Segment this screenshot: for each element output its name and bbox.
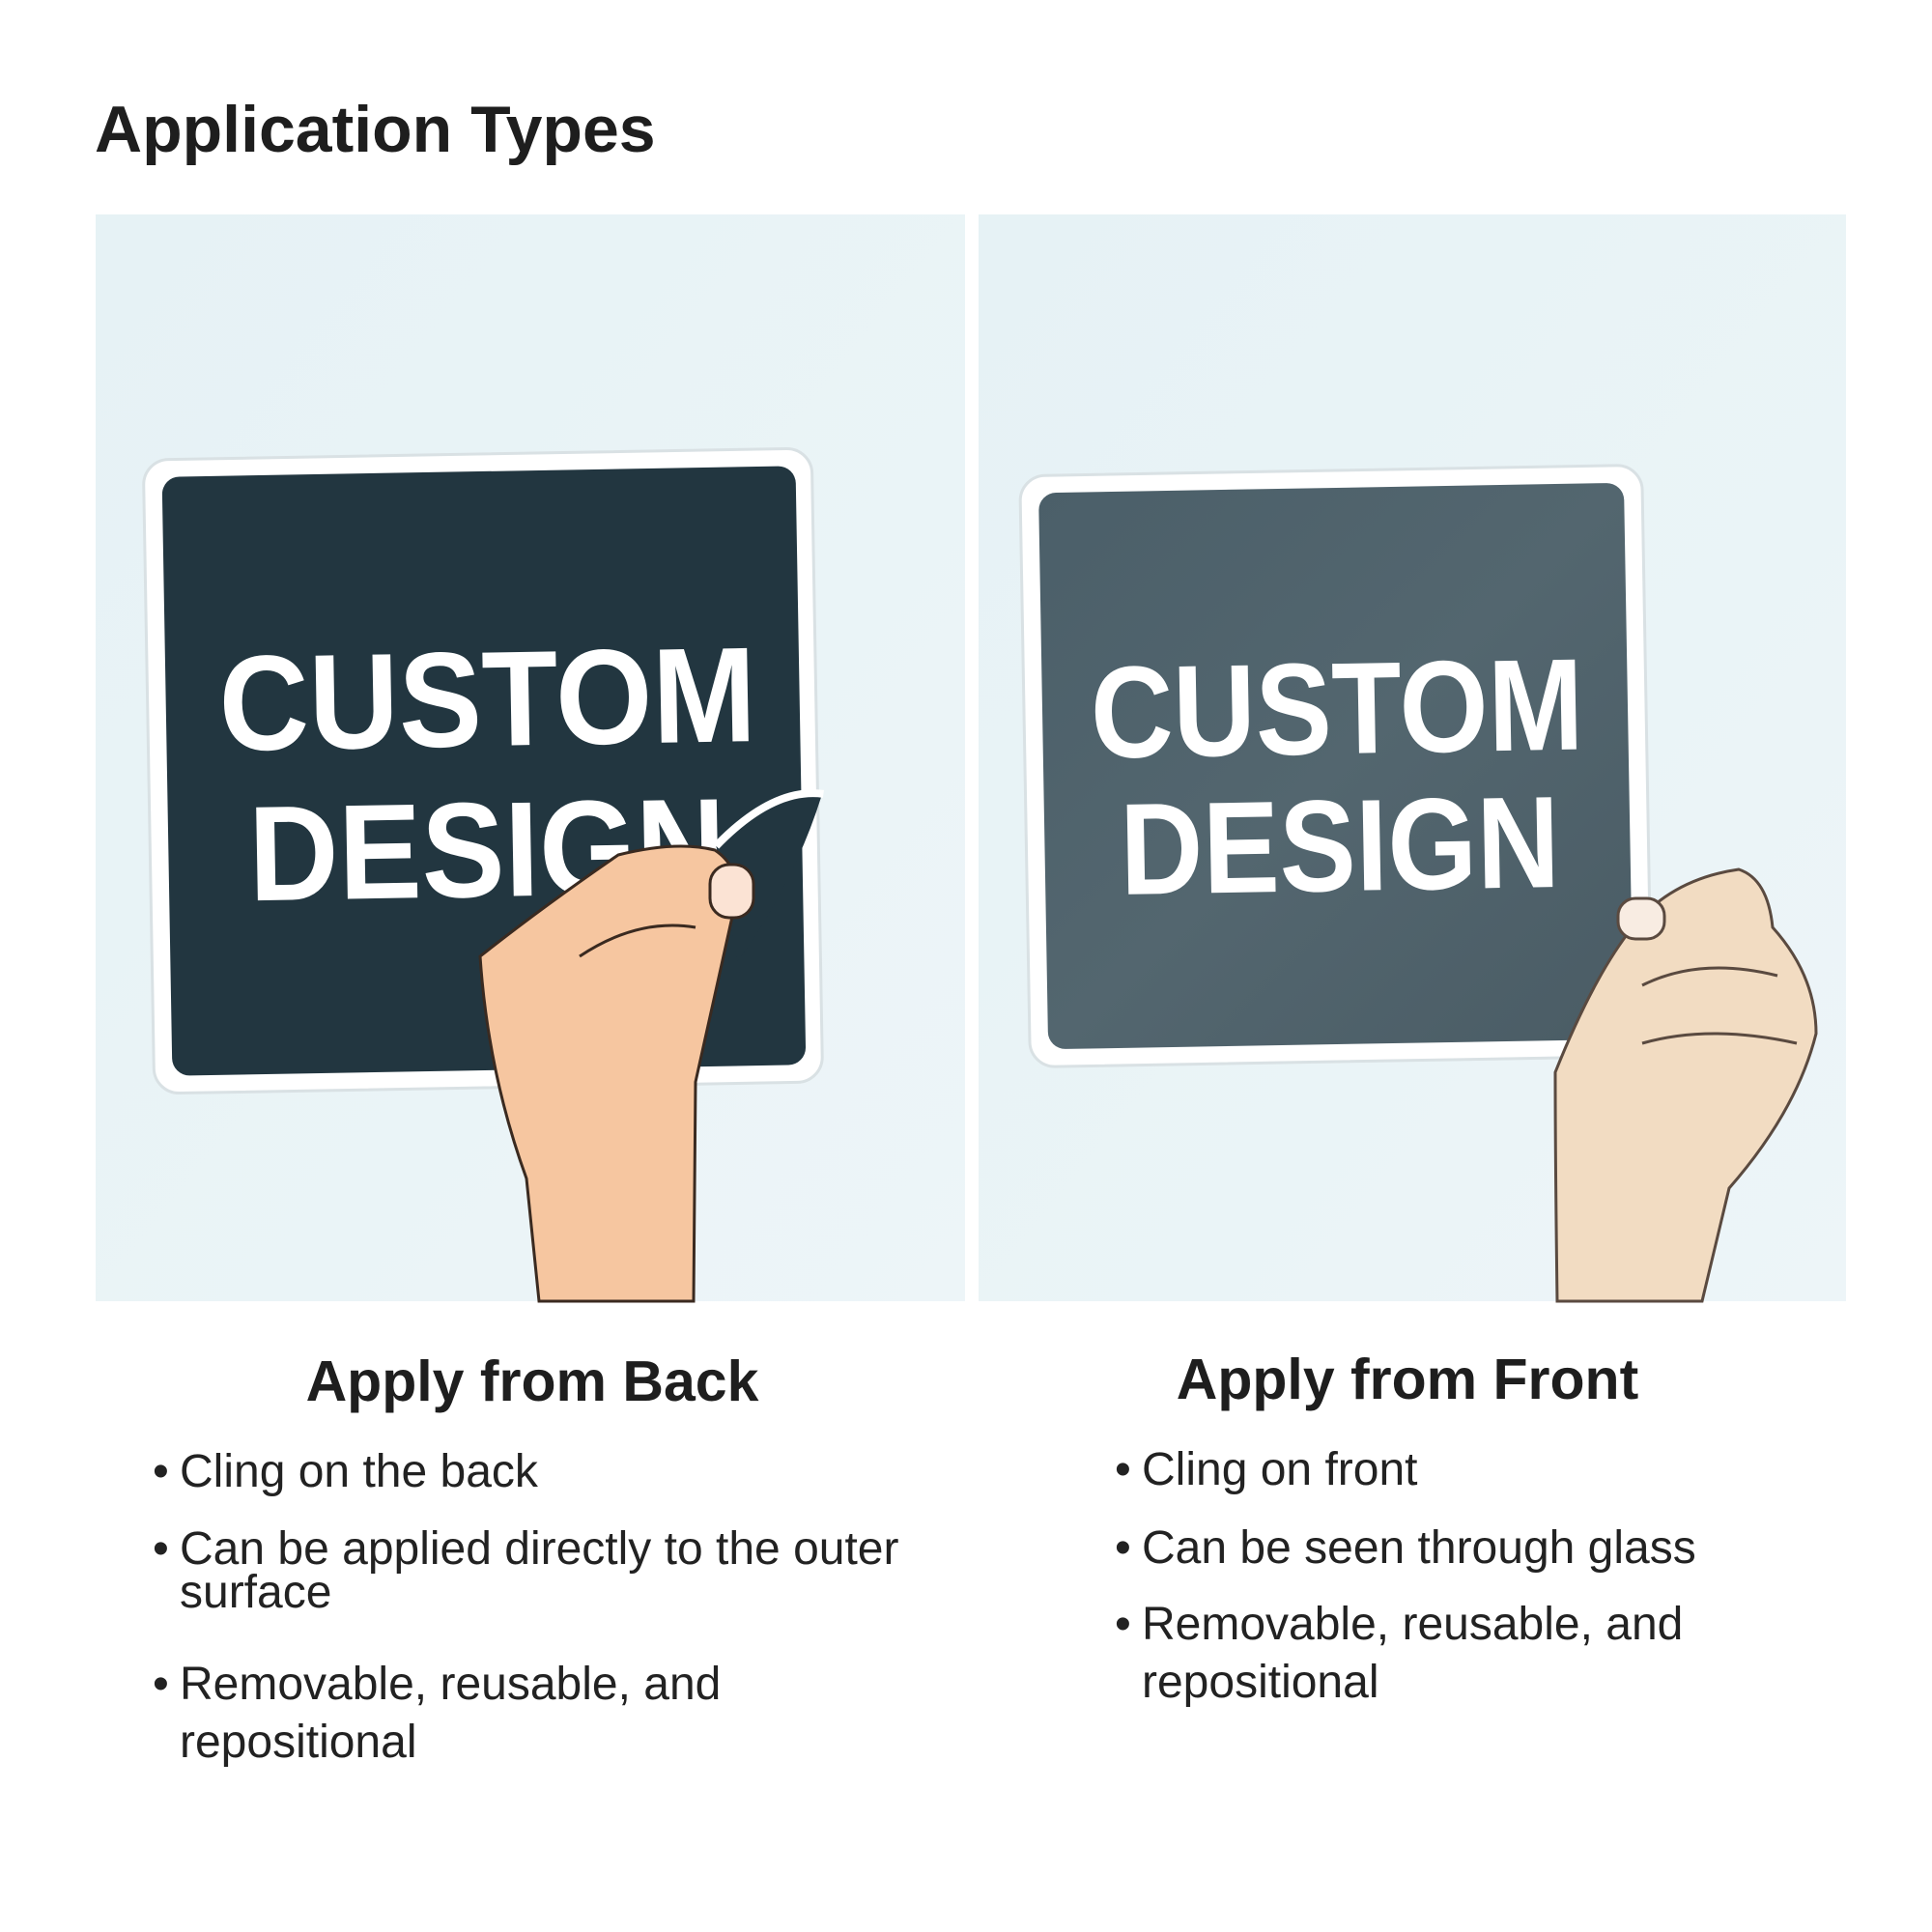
text block: back bullets: Can be applied directly to the outer bbox=[180, 1523, 898, 1575]
text block: back bullets bbox=[153, 1446, 898, 1768]
sticker: back: CUSTOM bbox=[217, 618, 757, 780]
sticker: back: DESIGN bbox=[247, 770, 727, 929]
text block: back bullets: • bbox=[153, 1523, 169, 1575]
text block: front bullets: • bbox=[1115, 1599, 1131, 1650]
text block: back bullets: repositional bbox=[180, 1717, 416, 1768]
text block: back bullets: • bbox=[153, 1659, 169, 1710]
text block: front bullets: Removable, reusable, and bbox=[1142, 1599, 1683, 1650]
text block: front bullets: Can be seen through glass bbox=[1142, 1522, 1696, 1574]
icon: hand back bbox=[480, 846, 736, 1301]
text block: front bullets bbox=[1115, 1444, 1696, 1708]
text block: back bullets: • bbox=[153, 1446, 169, 1497]
sticker: front: DESIGN bbox=[1119, 769, 1561, 923]
title: Application Types bbox=[95, 93, 656, 166]
text block: back bullets: Cling on the back bbox=[180, 1446, 539, 1497]
panel: apply from front bbox=[979, 214, 1846, 1301]
heading: apply from back: Apply from Back bbox=[306, 1350, 759, 1413]
text block: back bullets: surface bbox=[180, 1567, 331, 1618]
panel: apply from back bbox=[96, 214, 965, 1301]
sticker: back bbox=[143, 448, 829, 1094]
heading: apply from front: Apply from Front bbox=[1177, 1348, 1638, 1411]
sticker: front bbox=[1020, 465, 1652, 1067]
text block: front bullets: repositional bbox=[1142, 1657, 1378, 1708]
sticker: front: CUSTOM bbox=[1090, 632, 1584, 785]
text block: front bullets: • bbox=[1115, 1444, 1131, 1495]
text block: front bullets: Cling on front bbox=[1142, 1444, 1418, 1495]
text block: front bullets: • bbox=[1115, 1522, 1131, 1574]
icon: hand front bbox=[1555, 869, 1816, 1301]
text block: back bullets: Removable, reusable, and bbox=[180, 1659, 721, 1710]
